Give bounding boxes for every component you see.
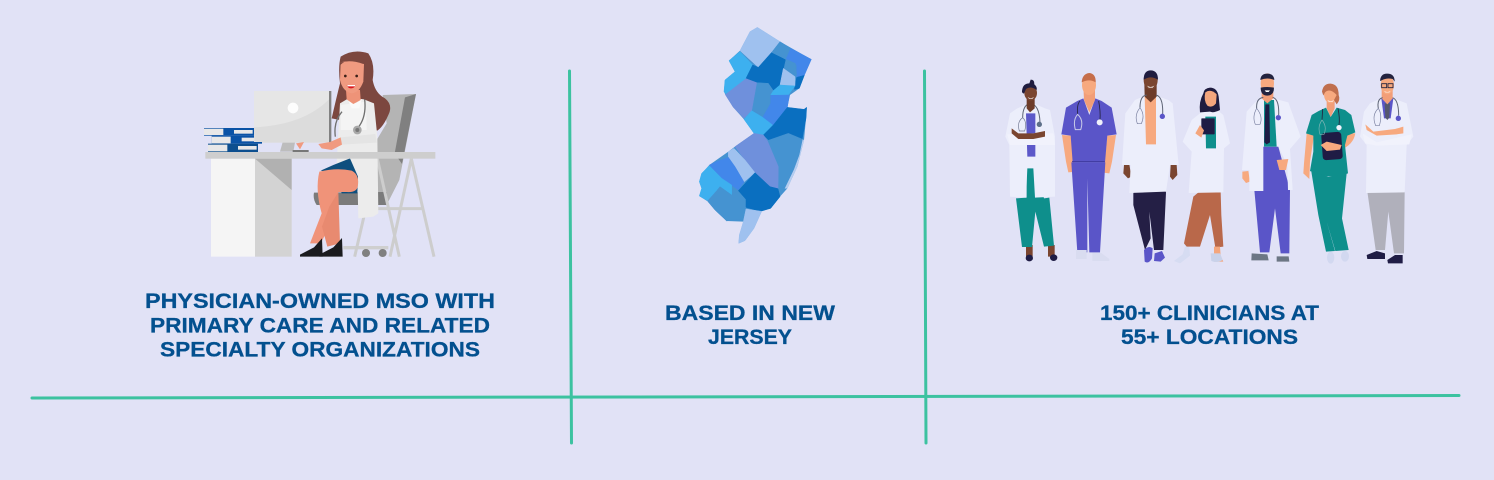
heading: MSO description: SPECIALTY ORGANIZATIONS	[160, 338, 480, 362]
clinician 1: woman in white coat, teal pants	[1005, 80, 1057, 261]
horizontal green divider	[32, 396, 1459, 398]
stethoscope	[335, 99, 365, 137]
icon: group of clinicians	[1005, 70, 1413, 264]
hair back	[332, 51, 390, 131]
panel: New Jersey	[665, 27, 835, 349]
clinician 2: man in purple scrubs	[1061, 73, 1117, 261]
vertical green divider right	[924, 71, 926, 443]
monitor	[280, 128, 298, 152]
legs	[310, 169, 358, 243]
icon: New Jersey county map	[699, 27, 811, 243]
clinician 6: woman in teal scrubs with clipboard	[1303, 84, 1355, 264]
chair back	[377, 94, 416, 205]
desk legs	[355, 159, 434, 257]
heading: clinicians and locations: 150+ CLINICIANS AT	[1100, 302, 1319, 325]
heading: MSO description	[145, 290, 495, 362]
clinician 7: man with glasses, grey pants	[1360, 74, 1413, 263]
heading: location: BASED IN NEW	[665, 302, 835, 325]
vertical green divider left	[570, 71, 572, 443]
clinician 4: woman with tablet, brown pants	[1174, 88, 1230, 263]
neck and face	[346, 90, 361, 104]
heading: clinicians and locations: 55+ LOCATIONS	[1121, 326, 1298, 349]
arms and hands	[341, 134, 377, 145]
books	[204, 128, 254, 136]
panel: clinicians	[1005, 70, 1413, 349]
heading: location: JERSEY	[708, 326, 792, 349]
heading: MSO description: PHYSICIAN-OWNED MSO WITH	[145, 290, 495, 313]
clinician 3: man in white coat, dark pants	[1122, 70, 1179, 262]
heading: MSO description: PRIMARY CARE AND RELATED	[150, 314, 490, 338]
heading: clinicians and locations	[1100, 302, 1319, 349]
heading: location	[665, 302, 835, 349]
coat	[337, 97, 378, 218]
clinician 5: bearded man with tie	[1242, 73, 1301, 262]
desk top	[205, 152, 435, 159]
desk cabinet	[211, 159, 255, 257]
panel: physician at desk	[145, 51, 495, 361]
icon: physician at desk illustration	[204, 51, 435, 257]
shoes	[300, 238, 323, 257]
skirt	[321, 158, 358, 193]
